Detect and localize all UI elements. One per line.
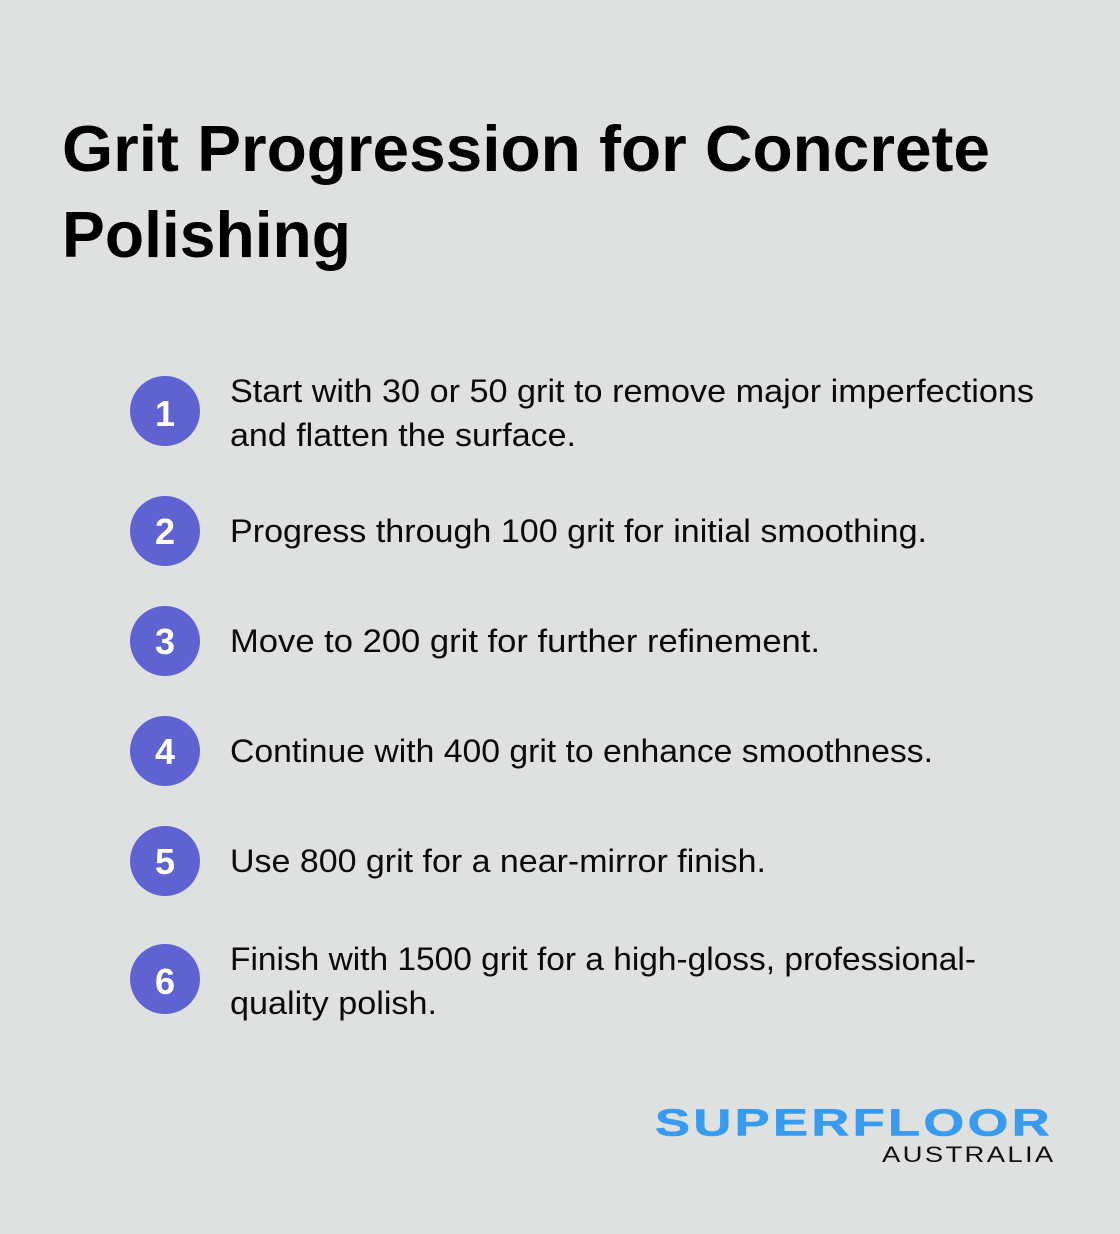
- step 5 badge: [130, 826, 200, 896]
- step 1 text: and flatten the surface.: [230, 417, 576, 453]
- title: [62, 112, 990, 271]
- step 3 text: Move to 200 grit for further refinement.: [230, 623, 820, 659]
- step 4: [130, 716, 933, 786]
- step 5 badge: 5: [155, 841, 175, 882]
- step 2 badge: 2: [155, 511, 175, 552]
- step 1: [130, 373, 1034, 453]
- step 3 badge: 3: [155, 621, 175, 662]
- step 3 badge: [130, 606, 200, 676]
- step 4 badge: [130, 716, 200, 786]
- step 1 badge: [130, 376, 200, 446]
- step 5: [130, 826, 766, 896]
- step 1 text: Start with 30 or 50 grit to remove major imperfections: [230, 373, 1034, 409]
- step 6: [130, 941, 976, 1021]
- step 4 text: Continue with 400 grit to enhance smoothness.: [230, 733, 933, 769]
- step 6 badge: [130, 944, 200, 1014]
- logo: [655, 1101, 1054, 1167]
- step 1 badge: 1: [155, 393, 175, 434]
- step 3: [130, 606, 820, 676]
- logo: AUSTRALIA: [882, 1143, 1054, 1167]
- step 4 badge: 4: [155, 731, 175, 772]
- logo: SUPERFLOOR: [655, 1101, 1050, 1144]
- title: Grit Progression for Concrete: [62, 112, 990, 185]
- title: Polishing: [62, 198, 351, 271]
- step 6 badge: 6: [155, 961, 175, 1002]
- step 5 text: Use 800 grit for a near-mirror finish.: [230, 843, 766, 879]
- step 6 text: Finish with 1500 grit for a high-gloss, professional-: [230, 941, 976, 977]
- step 6 text: [230, 941, 976, 1021]
- step 1 text: [230, 373, 1034, 453]
- step 2 text: Progress through 100 grit for initial smoothing.: [230, 513, 927, 549]
- step 2: [130, 496, 927, 566]
- step 6 text: quality polish.: [230, 985, 437, 1021]
- step 2 badge: [130, 496, 200, 566]
